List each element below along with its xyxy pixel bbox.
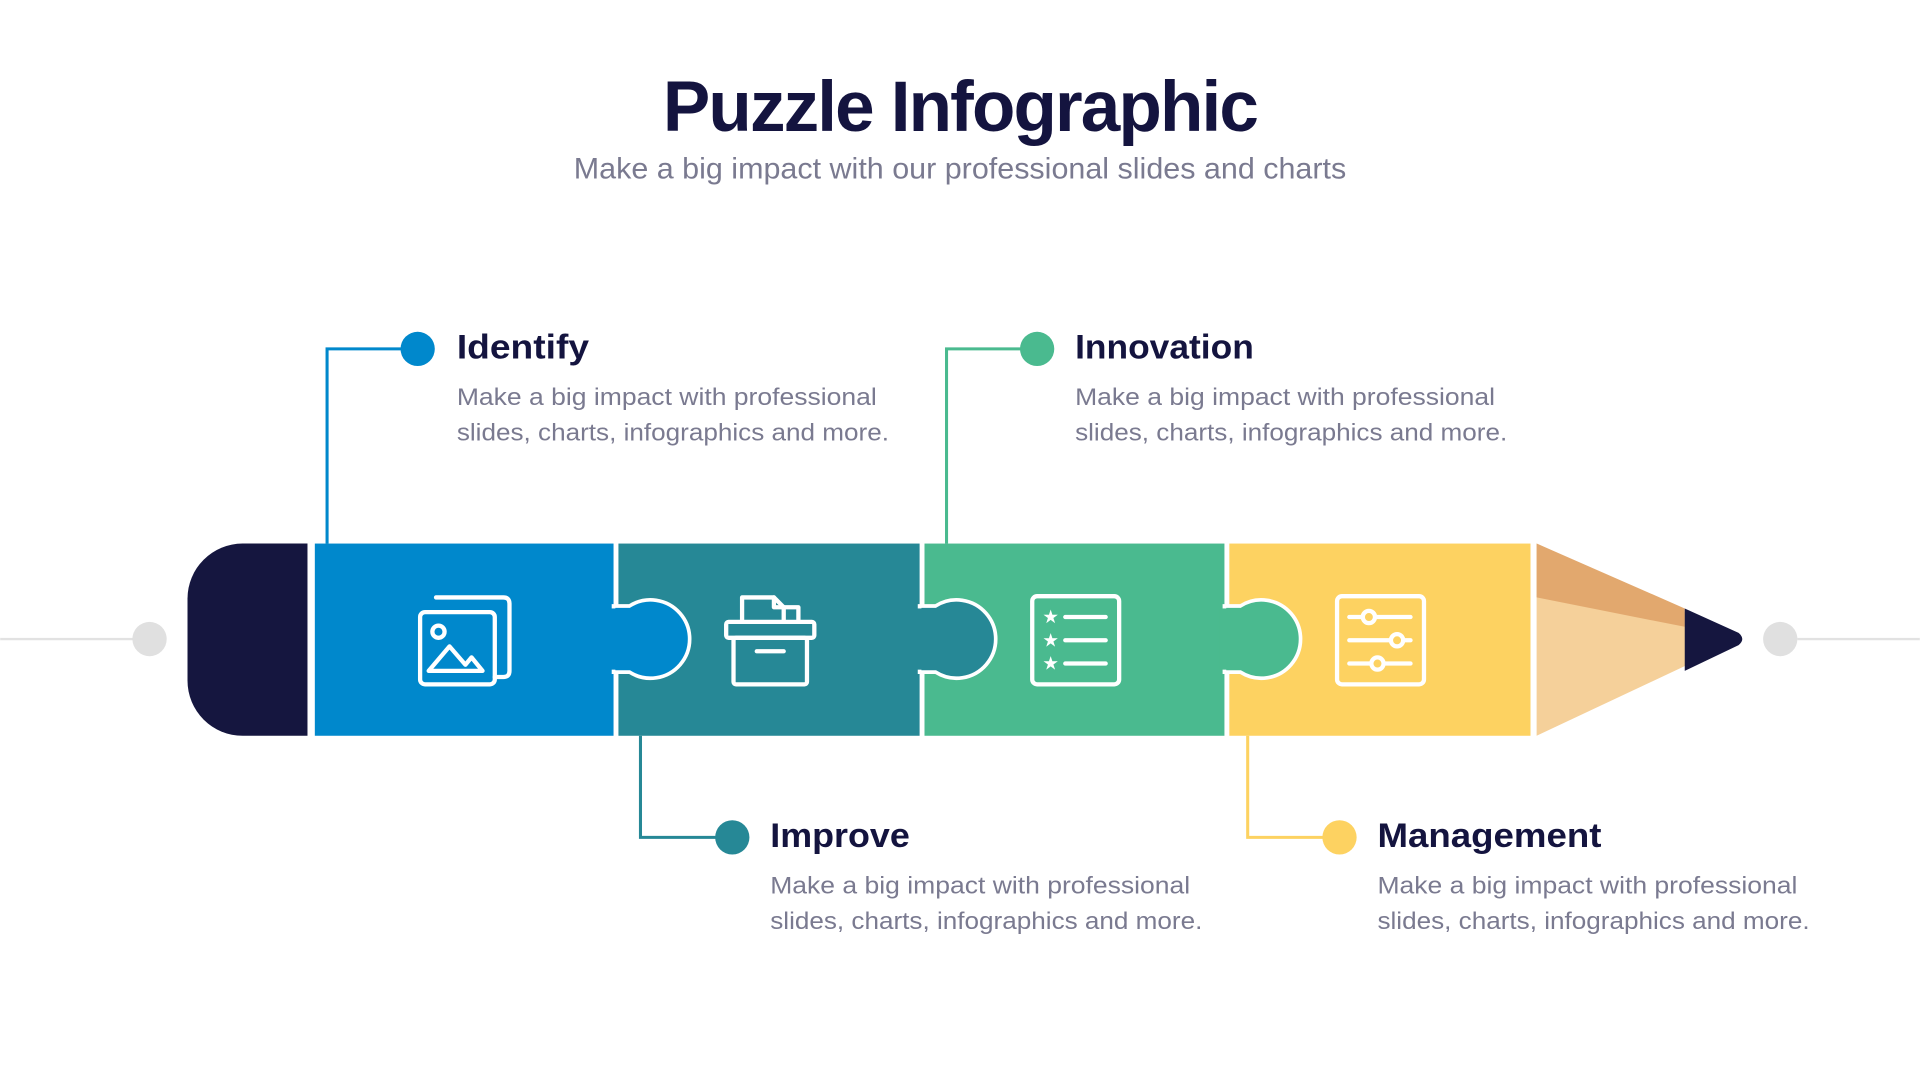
callout: innovation: Innovation [1075,329,1254,367]
puzzle piece: innovation [924,544,1224,736]
knob green [1224,600,1301,678]
pencil [188,544,1742,736]
subtitle: Make a big impact with our professional slides and charts [574,153,1346,186]
title: Puzzle Infographic [663,68,1257,147]
icon: rated list: ★ [1042,606,1059,627]
callout: improve: Improve [770,817,910,855]
callout: innovation: slides, charts, infographics and more. [1075,420,1507,447]
callout: improve: slides, charts, infographics and more. [770,908,1202,935]
icon: archive box [726,597,814,684]
callout: improve [640,736,1202,935]
puzzle piece: improve [618,544,920,736]
pencil lead [1685,608,1742,671]
icon: sliders [1337,596,1424,684]
knob blue [614,600,690,678]
callout: management: Make a big impact with professional [1377,873,1797,900]
callout: identify: slides, charts, infographics and more. [457,420,889,447]
left axis marker [0,622,167,656]
right axis marker [1763,622,1920,656]
icon: image [420,597,509,684]
icon: rated list: ★ [1042,629,1059,650]
callout: identify: Identify [457,329,589,367]
callout: management: slides, charts, infographics and more. [1377,908,1810,935]
puzzle piece: identify [315,544,614,736]
puzzle piece: management [1229,544,1530,736]
pencil tip wood [1537,544,1742,736]
icon: rated list: ★ [1042,653,1059,674]
callout: management: Management [1377,817,1601,855]
callout: management [1248,736,1810,935]
icon: rated list [1032,596,1119,684]
callout: improve: Make a big impact with professional [770,873,1190,900]
knob teal [920,600,996,678]
callout: identify [327,329,889,544]
callout: innovation [947,329,1507,544]
callout: identify: Make a big impact with professional [457,384,877,411]
eraser [188,544,307,736]
callout: innovation: Make a big impact with professional [1075,384,1495,411]
